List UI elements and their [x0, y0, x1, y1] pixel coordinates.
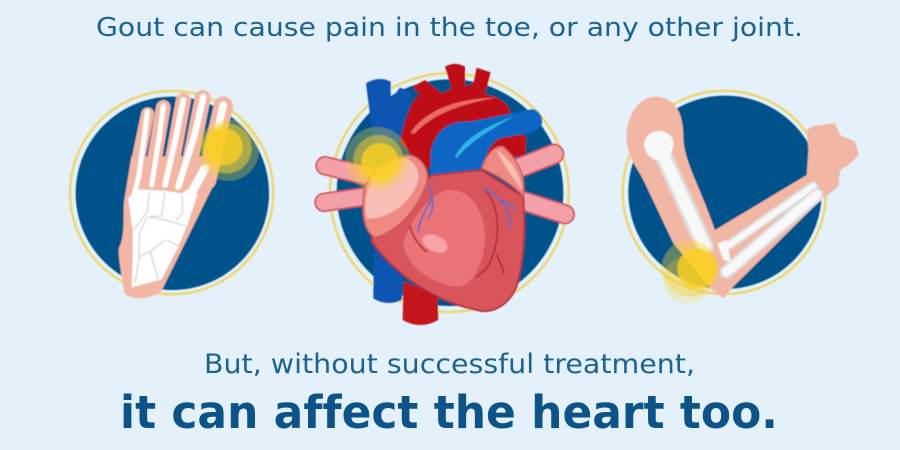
- right atrium: [363, 155, 428, 238]
- foot tarsal joints: [133, 193, 186, 283]
- coronary vessels: [410, 185, 515, 277]
- descending aorta: [403, 282, 438, 325]
- foot tarsal mass: [128, 187, 197, 287]
- ventricles: [372, 170, 524, 311]
- heart ring and circle: [330, 73, 569, 312]
- foot skin: [119, 98, 223, 298]
- illustration: foot: [70, 91, 273, 298]
- text: treatment caveat: But, without successful treatment,: [204, 349, 695, 380]
- pain glow: heart: [345, 127, 409, 191]
- forearm bones: [717, 186, 817, 272]
- aorta highlight: [410, 98, 497, 133]
- pain glow: elbow: [662, 240, 718, 304]
- shine: [420, 230, 450, 256]
- pulmonary artery: [430, 109, 542, 187]
- descending vena cava: [373, 242, 403, 303]
- pulmonary veins: [324, 154, 565, 214]
- illustration: heart: [324, 64, 569, 325]
- superior vena cava: [366, 79, 413, 142]
- heading: gout intro: Gout can cause pain in the toe, or any other joint.: [96, 13, 803, 43]
- ventricle highlight: [403, 190, 485, 287]
- left atrium: [482, 146, 524, 197]
- upper arm bone: [644, 131, 705, 247]
- headline: heart warning: it can affect the heart too.: [120, 386, 778, 439]
- pain glow: toe: [198, 119, 259, 181]
- foot bones: [134, 97, 223, 195]
- right atrium highlight: [365, 158, 418, 218]
- pulmonary artery highlight: [455, 117, 513, 158]
- arm ring and circle: [623, 91, 826, 294]
- arm skin: [627, 97, 859, 298]
- aortic arch: [400, 64, 527, 168]
- foot ring and circle: [70, 91, 273, 294]
- left atrium highlight: [497, 150, 522, 190]
- illustration: arm: [623, 91, 859, 304]
